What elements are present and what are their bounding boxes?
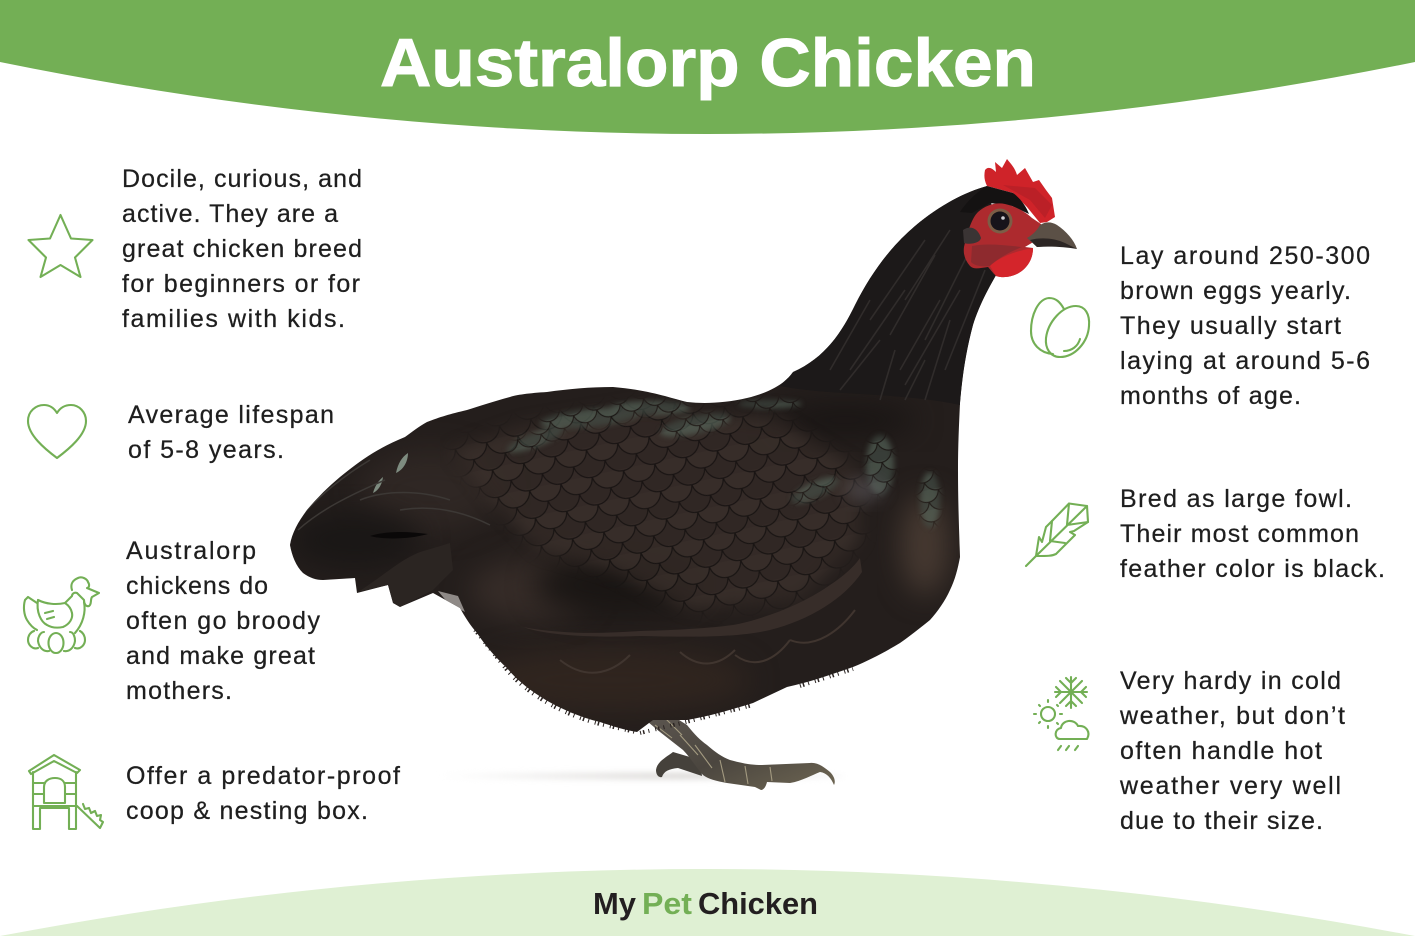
text: temperament: families with kids. — [122, 305, 345, 333]
text: lifespan: Average lifespan — [128, 401, 334, 429]
icon: star — [28, 215, 92, 277]
icon: broody hen on eggs — [24, 577, 99, 653]
text: egg laying: They usually start — [1120, 312, 1341, 340]
text: coop: Offer a predator-proof — [126, 762, 400, 790]
hen breast — [75, 602, 85, 633]
neck hackles — [830, 230, 985, 400]
hen head and neck — [38, 577, 99, 606]
ear patch — [963, 228, 981, 244]
text: size and color: Bred as large fowl. — [1120, 485, 1352, 513]
text: broodiness: often go broody — [126, 607, 320, 635]
title: Australorp Chicken — [380, 25, 1036, 101]
far toe — [656, 752, 702, 777]
text: climate hardiness: due to their size. — [1120, 807, 1323, 835]
ground shadow — [435, 772, 845, 780]
text: broodiness: Australorp — [126, 537, 256, 565]
text: size and color — [1120, 485, 1385, 583]
belly feather edges — [560, 610, 855, 673]
icon: feather — [1026, 504, 1088, 566]
icon: eggs — [1031, 298, 1089, 357]
text: egg laying — [1120, 242, 1370, 410]
iridescent scale patches — [508, 398, 942, 528]
logo: My Pet Chicken: My — [593, 886, 637, 921]
plumage shading and feathers — [290, 186, 1005, 712]
text: size and color: feather color is black. — [1120, 555, 1385, 583]
comb shading — [1003, 185, 1052, 218]
logo: My Pet Chicken — [593, 886, 818, 921]
text: temperament — [122, 165, 362, 333]
chicken illustration — [290, 159, 1077, 790]
hen wing — [38, 600, 72, 628]
eggs — [48, 633, 64, 653]
text: climate hardiness: Very hardy in cold — [1120, 667, 1341, 695]
icon: heart — [28, 405, 86, 458]
icon: weather — [1034, 677, 1088, 750]
snowflake — [1055, 677, 1087, 708]
dark tail and wing masses — [290, 512, 420, 568]
footer banner — [0, 869, 1415, 936]
logo: My Pet Chicken: Pet — [642, 886, 692, 921]
leg and foot — [648, 713, 835, 790]
tail streak highlights — [373, 453, 408, 493]
dark crown — [960, 186, 1029, 214]
text: climate hardiness: weather very well — [1119, 772, 1341, 800]
text: egg laying: Lay around 250-300 — [1120, 242, 1370, 270]
text: broodiness: and make great — [126, 642, 315, 670]
text: lifespan: of 5-8 years. — [128, 436, 284, 464]
text: egg laying: months of age. — [1120, 382, 1301, 410]
body silhouette — [290, 186, 1005, 732]
hen tail — [24, 597, 37, 630]
text: coop — [126, 762, 400, 825]
cheek shading — [971, 244, 1022, 266]
text: temperament: for beginners or for — [122, 270, 360, 298]
text: temperament: active. They are a — [122, 200, 338, 228]
fluffy fringe along underside — [475, 630, 853, 733]
cloud and rain — [1056, 721, 1088, 739]
text: temperament: great chicken breed — [122, 235, 362, 263]
text: climate hardiness: weather, but don’t — [1119, 702, 1345, 730]
logo: My Pet Chicken: Chicken — [698, 886, 818, 921]
text: climate hardiness — [1119, 667, 1345, 835]
text: coop: coop & nesting box. — [126, 797, 368, 825]
comb — [984, 159, 1055, 223]
beak — [1027, 222, 1077, 249]
header banner — [0, 0, 1415, 134]
text: climate hardiness: often handle hot — [1120, 737, 1322, 765]
text: temperament: Docile, curious, and — [122, 165, 362, 193]
leg scale marks — [655, 718, 772, 784]
text: egg laying: brown eggs yearly. — [1120, 277, 1351, 305]
grey shoulder sheen — [845, 478, 885, 502]
icon: chicken coop — [29, 755, 103, 829]
tail covert — [365, 548, 452, 607]
eye — [988, 208, 1012, 234]
face — [964, 203, 1041, 277]
warm brown shading — [368, 448, 480, 519]
text: lifespan — [128, 401, 334, 464]
wing lower edge — [523, 558, 862, 637]
pale under-tail feathers — [438, 591, 465, 612]
wattle — [990, 248, 1033, 277]
tail slit — [370, 532, 428, 538]
sun — [1041, 707, 1055, 721]
text: broodiness: mothers. — [126, 677, 232, 705]
brown scale cluster — [459, 410, 860, 610]
text: broodiness: chickens do — [126, 572, 268, 600]
text: size and color: Their most common — [1120, 520, 1359, 548]
text: broodiness — [126, 537, 320, 705]
neck — [780, 186, 1005, 405]
text: egg laying: laying at around 5-6 — [1120, 347, 1370, 375]
